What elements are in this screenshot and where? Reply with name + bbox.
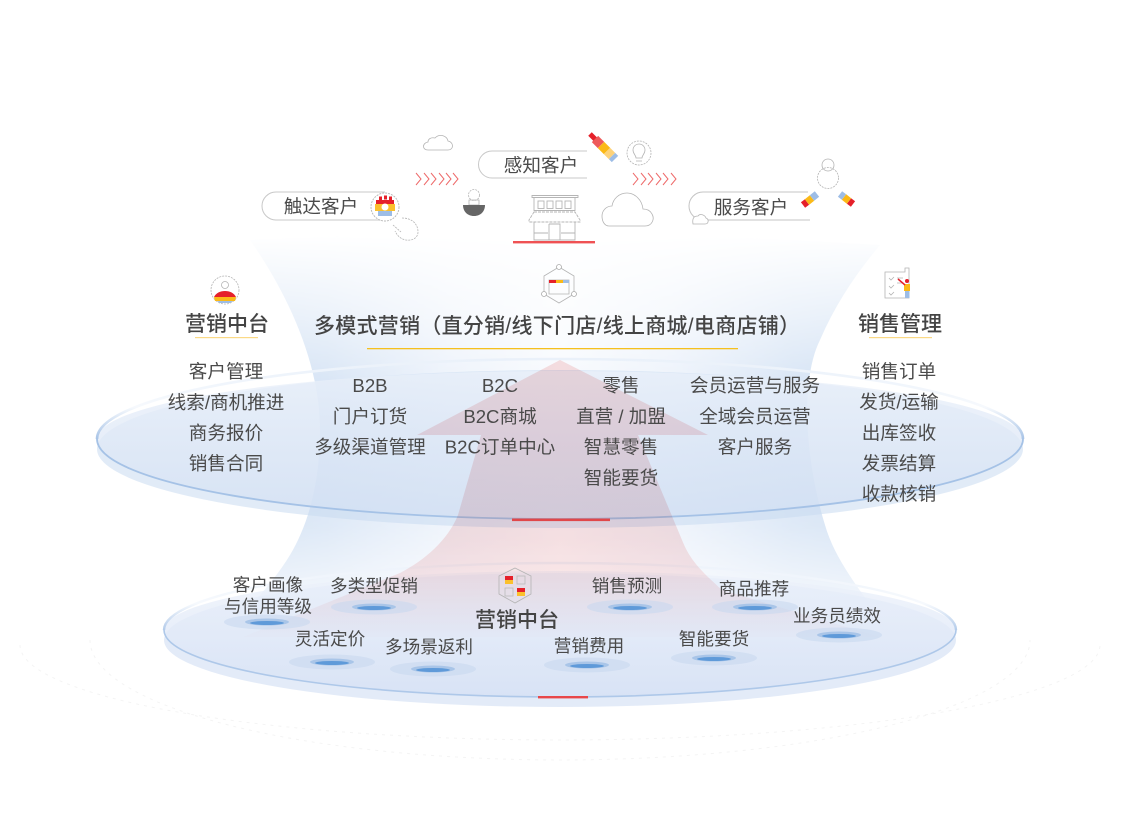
top flow: reach customers: [262, 192, 418, 240]
faint dotted orbit rings: [20, 640, 1100, 760]
list: B2B: 多级渠道管理: [314, 436, 426, 458]
list: left items: 线索/商机推进: [168, 392, 284, 413]
node: 多类型促销: 多类型促销: [330, 576, 418, 596]
label: 感知客户: 感知客户: [504, 155, 578, 176]
list: 零售: 直营 / 加盟: [576, 406, 666, 427]
icon: hexagon network: [542, 264, 576, 303]
chevrons: right: [633, 173, 676, 185]
chevrons: left: [416, 173, 458, 185]
icon: storefront: [529, 196, 580, 240]
list: 会员: 全域会员运营: [699, 406, 811, 427]
heading: lower 营销中台: 营销中台: [475, 609, 559, 632]
list: left items: 客户管理: [189, 361, 263, 382]
icon: small cloud on pill: [693, 215, 708, 224]
red marker: upper disc: [512, 518, 610, 521]
lower disc: platform title: [475, 568, 559, 632]
list: B2B: 门户订货: [333, 406, 407, 427]
icon: service person with pencils: [803, 159, 853, 205]
node: 多类型促销: [330, 576, 418, 614]
pill: 服务客户: [689, 192, 810, 220]
list: left items: 销售合同: [189, 453, 263, 474]
node: 客户画像: 与信用等级: [224, 596, 312, 616]
node: 客户画像: 客户画像: [233, 575, 304, 595]
list: 零售: [576, 375, 666, 488]
label: 服务客户: 服务客户: [714, 197, 788, 218]
list: right items: 发票结算: [862, 453, 936, 474]
list: right items: 发货/运输: [859, 392, 939, 412]
node: 多场景返利: [385, 637, 476, 676]
list: right items: 收款核销: [862, 484, 936, 504]
list: right items: [859, 361, 939, 504]
list: right items: 销售订单: [862, 361, 936, 382]
node: 商品推荐: 商品推荐: [719, 579, 789, 599]
heading: 营销中台: 营销中台: [185, 313, 269, 336]
icon: red pencil: [590, 134, 615, 159]
list: 会员: 客户服务: [718, 436, 792, 458]
underline: [195, 337, 258, 338]
top flow: sense customers: [479, 151, 587, 178]
panel: lower disc: [164, 563, 956, 707]
column: left 营销中台: [168, 276, 284, 474]
icon: gear and hand: [371, 193, 418, 240]
list: left items: [168, 361, 284, 474]
node: 智能要货: 智能要货: [679, 629, 749, 649]
list: B2B: [314, 375, 426, 458]
icon: person in circle: [211, 276, 239, 304]
icon: light bulb: [627, 141, 651, 165]
underline: [869, 337, 932, 338]
list: 会员: [690, 375, 820, 458]
node: 商品推荐: [712, 579, 798, 614]
node: 多场景返利: 多场景返利: [385, 637, 473, 657]
list: B2C: [445, 375, 555, 458]
list: B2B: B2B: [352, 375, 388, 396]
node: 客户画像: [224, 575, 312, 630]
node: 业务员绩效: [793, 606, 882, 642]
icon: checklist with person: [885, 268, 910, 298]
node: 灵活定价: [289, 629, 375, 670]
list: 零售: 智能要货: [584, 468, 658, 488]
node: 销售预测: 销售预测: [592, 576, 662, 596]
pill: 感知客户: [479, 151, 587, 178]
node: 业务员绩效: 业务员绩效: [793, 606, 881, 626]
icon: small cloud: [424, 135, 452, 150]
list: 零售: 零售: [602, 375, 640, 396]
node: 营销费用: 营销费用: [554, 636, 624, 656]
list: right items: 出库签收: [862, 422, 936, 444]
red underline: store: [513, 241, 595, 243]
icon: person with bowl: [463, 190, 485, 216]
red marker: lower disc: [538, 696, 588, 698]
list: B2C: B2C商城: [463, 406, 537, 427]
label: 触达客户: 触达客户: [284, 196, 358, 217]
list: 零售: 智慧零售: [584, 436, 658, 458]
heading: 多模式营销: 多模式营销（直分销/线下门店/线上商城/电商店铺）: [314, 315, 800, 338]
column: center 多模式营销: [314, 264, 820, 488]
node: 营销费用: [544, 636, 630, 672]
heading: 销售管理: 销售管理: [858, 313, 942, 336]
hourglass background glow: [264, 265, 863, 592]
top flow: serve customers: [689, 192, 810, 224]
node: 智能要货: [671, 629, 757, 666]
icon: large cloud: [602, 193, 653, 226]
list: B2C: B2C订单中心: [445, 436, 555, 458]
column: right 销售管理: [858, 268, 942, 504]
node: 销售预测: [587, 576, 673, 614]
underline: [367, 348, 738, 349]
list: 会员: 会员运营与服务: [690, 375, 820, 396]
pill: 触达客户: [262, 192, 385, 220]
node: 灵活定价: 灵活定价: [295, 629, 366, 649]
icon: hexagon grid: [499, 568, 531, 603]
large upward arrow: [243, 360, 880, 637]
panel: upper disc: [97, 359, 1023, 528]
list: left items: 商务报价: [189, 422, 264, 444]
list: B2C: B2C: [482, 375, 518, 396]
